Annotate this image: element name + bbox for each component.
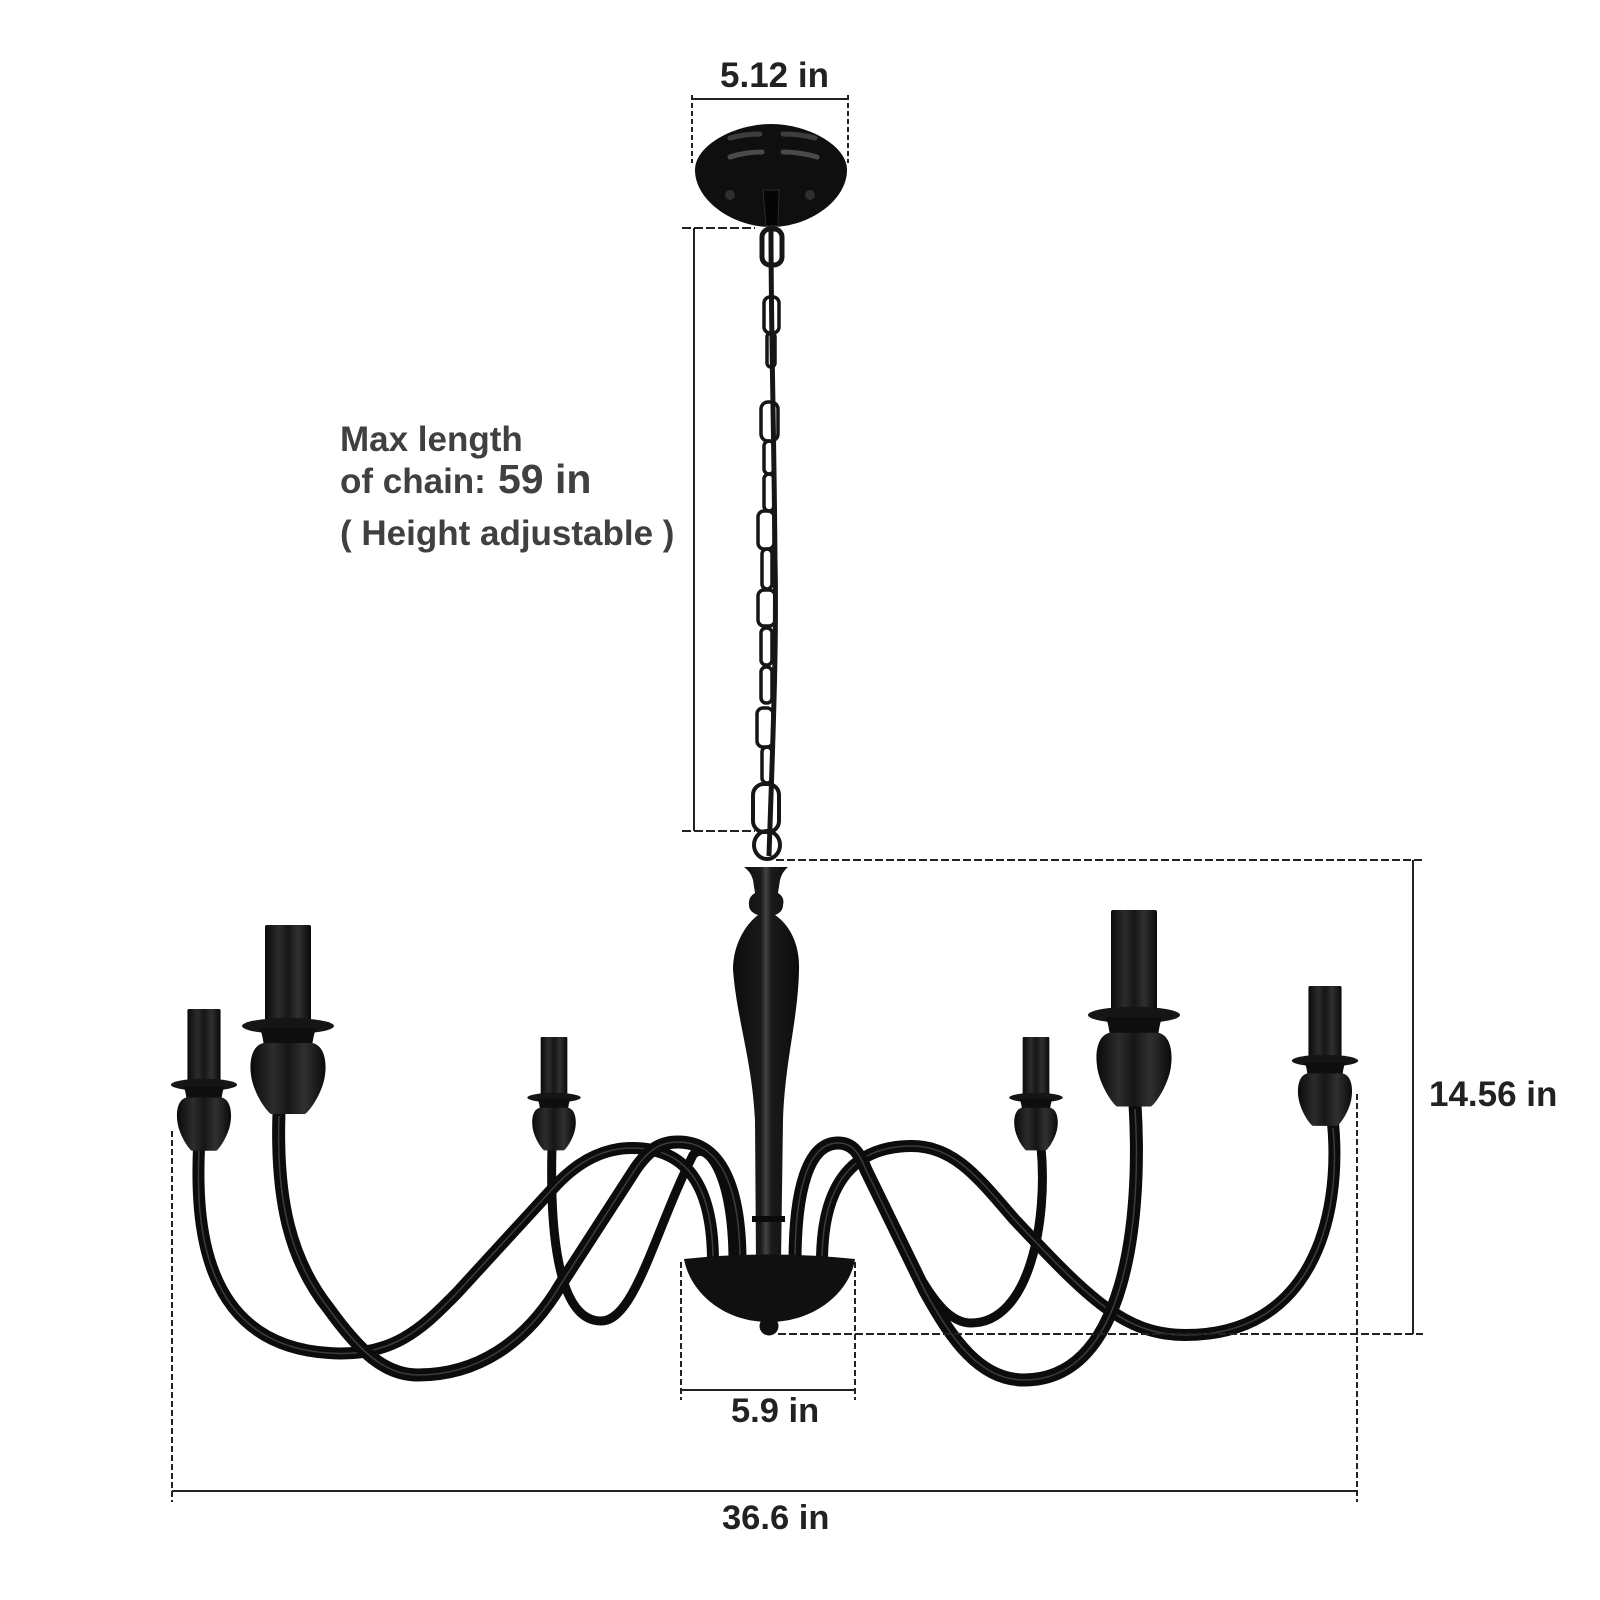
text: max chain length: of chain: — [340, 462, 486, 501]
text: max chain length — [340, 420, 674, 553]
label: 36.6 in: 36.6 in — [722, 1499, 829, 1537]
center column — [733, 867, 799, 1262]
text: max chain length: 59 in — [498, 456, 591, 502]
label: 5.9 in: 5.9 in — [731, 1392, 819, 1430]
ceiling canopy — [695, 124, 847, 227]
text: max chain length: Max length — [340, 420, 523, 459]
left outer arm — [198, 1147, 713, 1354]
left outer candle — [171, 1009, 237, 1151]
right outer arm — [822, 1123, 1334, 1335]
left large arm — [279, 1112, 740, 1375]
dimension: body height — [776, 860, 1557, 1334]
label: 5.12 in: 5.12 in — [720, 56, 829, 95]
left arms and candles — [171, 925, 740, 1375]
left small arm — [552, 1147, 733, 1321]
left small candle — [527, 1037, 581, 1150]
right large candle — [1088, 910, 1180, 1107]
right large arm — [795, 1104, 1136, 1380]
chandelier — [171, 124, 1358, 1380]
right arms and candles — [795, 910, 1358, 1380]
left large candle — [242, 925, 334, 1114]
dimension: bowl width — [681, 1262, 855, 1430]
bottom bowl — [684, 1254, 855, 1336]
text: max chain length: ( Height adjustable ) — [340, 514, 674, 553]
right small candle — [1009, 1037, 1063, 1150]
right small arm — [923, 1147, 1042, 1323]
hanging chain — [753, 229, 782, 859]
right outer candle — [1292, 986, 1358, 1126]
label: 14.56 in: 14.56 in — [1429, 1075, 1557, 1114]
dimension: canopy width — [692, 56, 848, 163]
dimension: overall width — [172, 1094, 1357, 1537]
dimension: chain length — [682, 228, 755, 831]
